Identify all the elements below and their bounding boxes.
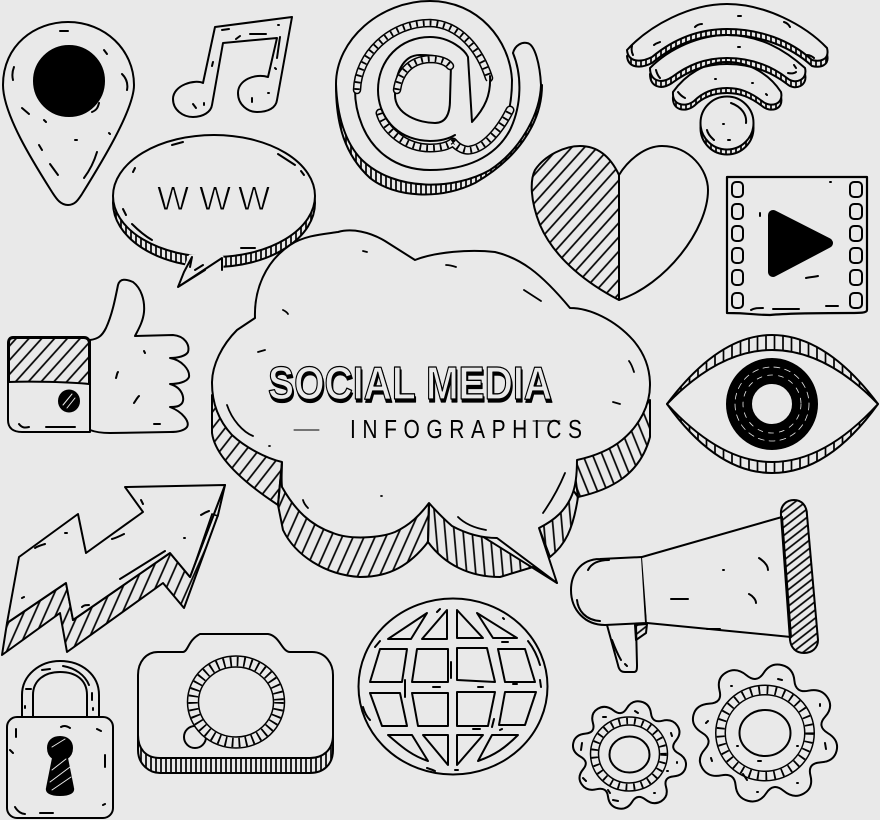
icon: rising arrow xyxy=(2,485,225,655)
wifi dot xyxy=(700,96,754,154)
speech cloud with title xyxy=(212,230,650,583)
camera lens xyxy=(193,662,279,742)
icon: small gear xyxy=(562,690,697,820)
icon: at sign xyxy=(336,1,542,194)
icon: video film frame xyxy=(727,177,867,315)
wifi top arc xyxy=(627,4,828,67)
icon: speech bubble www xyxy=(113,135,315,287)
keyhole xyxy=(47,737,73,795)
icon: eye xyxy=(667,335,878,473)
wifi low arc xyxy=(673,62,781,110)
icon: half hatched heart xyxy=(532,146,708,300)
megaphone rim xyxy=(781,500,818,653)
icon: large gear xyxy=(677,647,853,819)
megaphone handle xyxy=(607,625,637,672)
wifi middle arc xyxy=(650,35,805,87)
icon: wifi xyxy=(627,4,828,154)
title: social media: SOCIAL MEDIA xyxy=(268,357,552,409)
thumb hand xyxy=(90,280,189,433)
cloud face xyxy=(212,230,650,583)
icon: globe xyxy=(358,598,548,774)
title: social media: SOCIAL MEDIA xyxy=(269,360,553,412)
icon: location pin xyxy=(3,22,134,205)
subtitle: infographics: INFOGRAPHICS xyxy=(350,415,582,443)
cloud highlight marks xyxy=(227,251,634,530)
megaphone cone xyxy=(642,517,791,637)
icon: music notes xyxy=(173,17,292,117)
icon: thumbs up xyxy=(8,280,189,433)
www text: WWW xyxy=(157,180,270,218)
iris xyxy=(726,358,818,450)
icon: padlock xyxy=(7,661,113,818)
camera knob xyxy=(184,726,206,748)
megaphone body xyxy=(571,557,646,625)
icon: megaphone xyxy=(571,500,818,672)
thumb cuff xyxy=(8,337,90,432)
icon: camera xyxy=(138,634,333,773)
cloud extrusion xyxy=(212,395,650,583)
play triangle xyxy=(773,215,828,272)
